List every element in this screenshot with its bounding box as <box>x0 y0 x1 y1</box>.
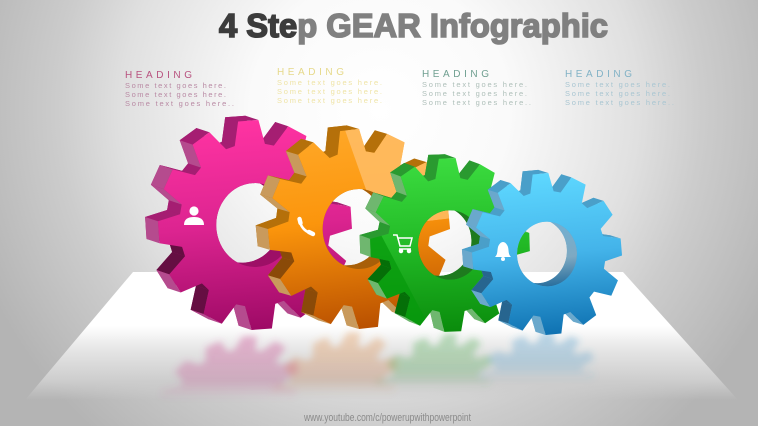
icon: phone <box>300 219 313 234</box>
text block: green heading: HEADING <box>422 69 489 80</box>
text block: blue heading: Some text goes here. <box>565 80 670 89</box>
gear: orange <box>256 125 450 329</box>
text block: blue heading: Some text goes here. <box>565 89 670 98</box>
text block: blue heading: Some text goes here.. <box>565 98 674 107</box>
text block: yellow heading <box>277 67 382 105</box>
text block: green heading: Some text goes here.. <box>422 98 531 107</box>
text block: yellow heading: Some text goes here. <box>277 87 382 96</box>
text block: green heading <box>422 69 531 107</box>
gear: pink <box>139 108 358 337</box>
gear: blue <box>456 163 628 342</box>
icon: bell <box>495 242 511 261</box>
text block: yellow heading: Some text goes here. <box>277 96 382 105</box>
footer url: www.youtube.com/c/powerupwithpowerpoint <box>303 412 471 424</box>
gear: green <box>357 151 532 335</box>
text block: pink heading <box>125 70 234 108</box>
text block: yellow heading: HEADING <box>277 67 344 78</box>
text block: yellow heading: Some text goes here. <box>277 78 382 87</box>
text block: blue heading: HEADING <box>565 69 632 80</box>
gear reflections <box>159 332 606 399</box>
text block: pink heading: Some text goes here. <box>125 81 226 90</box>
text block: green heading: Some text goes here. <box>422 89 527 98</box>
text block: blue heading <box>565 69 674 107</box>
text block: pink heading: HEADING <box>125 70 192 81</box>
icon: person <box>184 206 204 225</box>
white table surface <box>25 272 738 400</box>
text block: pink heading: Some text goes here. <box>125 90 226 99</box>
title: 4 Step GEAR Infographic <box>219 7 608 44</box>
text block: pink heading: Some text goes here.. <box>125 99 234 108</box>
icon: cart <box>393 235 412 252</box>
text block: green heading: Some text goes here. <box>422 80 527 89</box>
